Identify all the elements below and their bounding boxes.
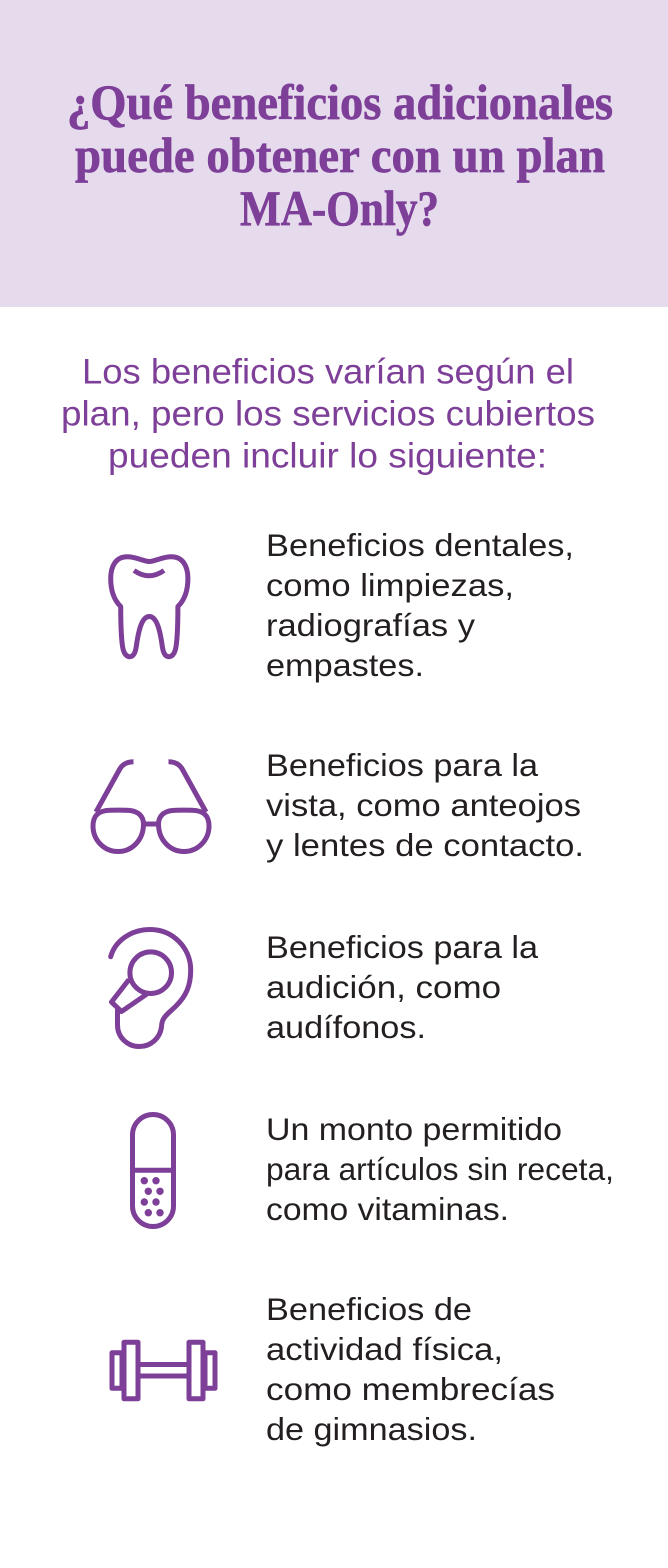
- body text: dental: Beneficios dentales,: [266, 527, 574, 563]
- body text: hearing: audífonos.: [266, 1009, 426, 1045]
- body text: fitness: como membrecías: [266, 1371, 555, 1407]
- panel: title banner: [0, 0, 668, 307]
- body text: fitness: [266, 1291, 555, 1447]
- body text: over-the-counter: para artículos sin receta,: [266, 1151, 614, 1187]
- body text: vision: vista, como anteojos: [266, 787, 581, 823]
- title: [67, 74, 613, 236]
- title: puede obtener con un plan: [75, 127, 605, 183]
- body text: dental: empastes.: [266, 647, 424, 683]
- intro text: plan, pero los servicios cubiertos: [61, 394, 595, 434]
- icon: tooth: [111, 557, 188, 657]
- body text: hearing: audición, como: [266, 969, 501, 1005]
- body text: dental: [266, 527, 574, 683]
- title: ¿Qué beneficios adicionales: [67, 74, 613, 130]
- icon: pill capsule: [132, 1114, 174, 1226]
- body text: dental: radiografías y: [266, 607, 475, 643]
- body text: vision: Beneficios para la: [266, 747, 539, 783]
- title: MA-Only?: [240, 180, 439, 236]
- body text: vision: y lentes de contacto.: [266, 827, 584, 863]
- icon: dumbbell: [112, 1342, 215, 1399]
- body text: fitness: de gimnasios.: [266, 1411, 477, 1447]
- body text: hearing: [266, 929, 539, 1045]
- body text: over-the-counter: [266, 1111, 614, 1227]
- body text: fitness: actividad física,: [266, 1331, 503, 1367]
- body text: fitness: Beneficios de: [266, 1291, 472, 1327]
- body text: hearing: Beneficios para la: [266, 929, 539, 965]
- body text: vision: [266, 747, 584, 863]
- body text: over-the-counter: Un monto permitido: [266, 1111, 562, 1147]
- intro text: pueden incluir lo siguiente:: [108, 436, 547, 476]
- body text: over-the-counter: como vitaminas.: [266, 1191, 509, 1227]
- icon: ear with hearing aid: [111, 930, 191, 1046]
- intro text: [61, 352, 595, 476]
- body text: dental: como limpiezas,: [266, 567, 514, 603]
- intro text: Los beneficios varían según el: [82, 352, 574, 392]
- icon: glasses: [93, 762, 209, 852]
